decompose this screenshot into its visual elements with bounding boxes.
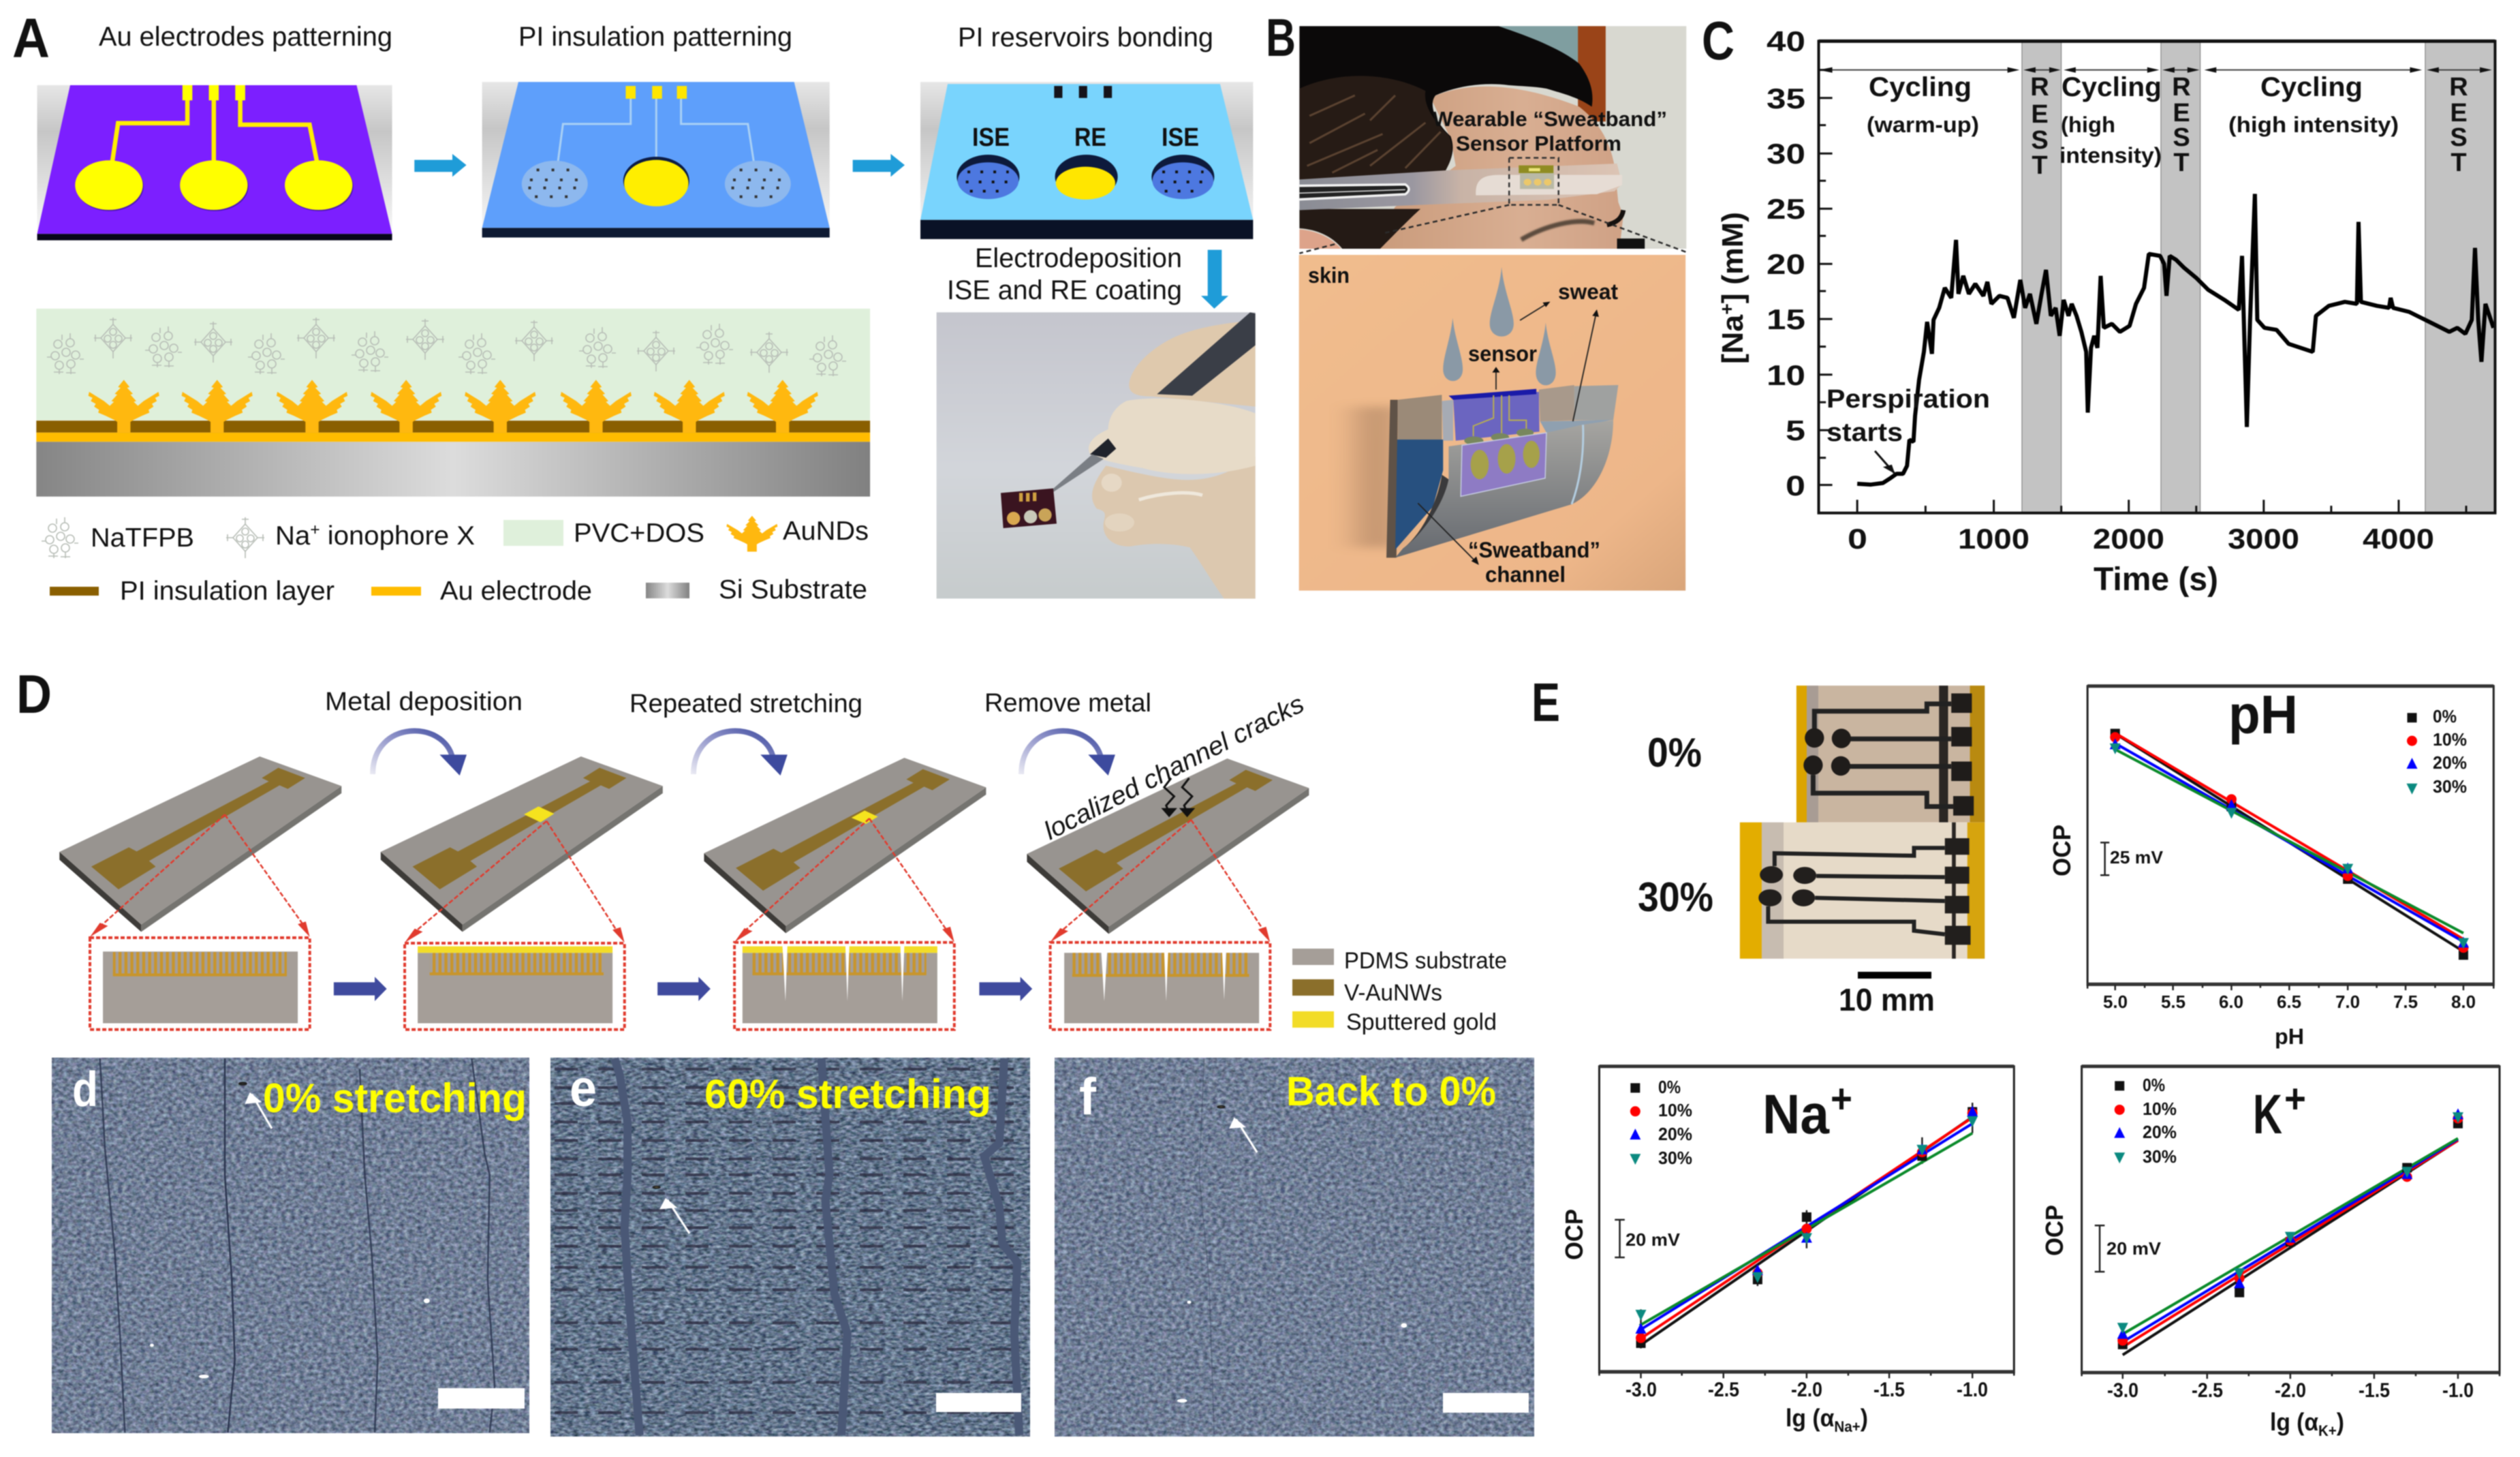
micrograph d: 0% stretching: d <box>72 1062 98 1117</box>
chart: K+ calibration: 20% <box>2143 1122 2177 1142</box>
process schematic: zoomed cross-sections <box>90 731 1270 1030</box>
y axis title: + <box>1716 303 1737 315</box>
scale label: 10 mm: 10 mm <box>1839 982 1935 1017</box>
chart: pH calibration: 25 mV <box>2110 847 2164 868</box>
micrograph e: 60% stretching: e <box>570 1060 597 1118</box>
arrow: step 1 to step 2 <box>414 154 467 177</box>
phase labels: T <box>2451 149 2467 177</box>
x axis title: Time (s) <box>2094 562 2218 598</box>
phase labels: T <box>2032 151 2048 180</box>
x axis tick labels: 2000 <box>2093 523 2164 555</box>
chart: Na+ calibration: Na <box>1762 1084 1830 1146</box>
micrograph d: 0% stretching: 0% stretching <box>263 1075 527 1121</box>
annotation: perspiration starts: starts <box>1826 418 1903 447</box>
label: Electrodeposition ISE and RE coating: ISE and RE coating <box>947 275 1182 305</box>
photo: device at 30% strain <box>1740 823 1985 959</box>
reservoir labels: ISE RE ISE <box>972 123 1199 152</box>
phase labels: Cycling <box>1869 72 1972 102</box>
panel D: stretching induced cracks <box>16 664 1534 1437</box>
chart: pH calibration: 8.0 <box>2451 992 2476 1012</box>
chart: Na+ calibration: -1.0 <box>1957 1379 1988 1401</box>
chart: K+ calibration: OCP <box>2040 1205 2068 1256</box>
photo: hand holding sensor with tweezers <box>937 312 1256 598</box>
phase labels: R <box>2172 73 2191 102</box>
legend: cross-section materials: AuNDs <box>783 517 869 546</box>
x axis tick labels: 3000 <box>2228 523 2299 555</box>
heading: PI insulation patterning: PI insulation patterning <box>518 22 792 52</box>
y axis title: [Na <box>1716 316 1749 364</box>
phase labels: (high intensity) <box>2228 112 2399 137</box>
legend: schematic materials: PDMS substrate <box>1344 948 1507 974</box>
x axis tick labels <box>1848 523 2434 555</box>
label: 30%: 30% <box>1638 874 1713 920</box>
chart: K+ calibration: -2.5 <box>2192 1379 2223 1402</box>
panel letter C: C <box>1702 10 1735 71</box>
chart: Na+ calibration: 20 mV <box>1625 1229 1681 1250</box>
chart: Na+ calibration: -2.0 <box>1791 1379 1822 1401</box>
phase labels: intensity) <box>2059 143 2162 168</box>
legend: cross-section materials: Si Substrate <box>719 575 867 604</box>
phase labels <box>1867 72 2468 180</box>
micrograph f: back to 0%: f <box>1079 1068 1097 1126</box>
panel letter D: D <box>16 664 52 724</box>
panel E: stretchable sensor calibration <box>1531 672 2500 1439</box>
y axis tick labels: 0 <box>1786 470 1805 502</box>
panel letter B: B <box>1266 7 1296 67</box>
heading: Au electrodes patterning: Au electrodes patterning <box>99 22 392 52</box>
phase labels: S <box>2450 123 2468 152</box>
phase labels: Cycling <box>2260 72 2363 102</box>
chart: K+ calibration: K <box>2253 1084 2282 1146</box>
chart: pH calibration: 20% <box>2433 752 2467 773</box>
x axis tick labels: 4000 <box>2363 523 2434 555</box>
label: Wearable Sweatband Sensor Platform: Wearable “Sweatband” <box>1433 107 1667 131</box>
label: 0%: 0% <box>1647 730 1702 776</box>
chart: pH calibration: OCP <box>2048 825 2076 876</box>
y axis title: ] (mM) <box>1716 212 1749 303</box>
chart: K+ calibration: -1.0 <box>2442 1379 2474 1402</box>
illustration: sensor on skin with sweat drops <box>1299 255 1685 591</box>
chart: pH calibration: pH <box>2228 684 2298 745</box>
chart: K+ calibration: -3.0 <box>2107 1379 2138 1402</box>
chart: pH calibration: 0% <box>2433 706 2457 726</box>
label: Wearable Sweatband Sensor Platform: Sensor Platform <box>1456 132 1621 155</box>
phase labels: (warm-up) <box>1867 112 1979 137</box>
labels on illustration: “Sweatband” <box>1468 538 1600 562</box>
scale bar <box>1858 972 1931 979</box>
step label: Repeated stretching: Repeated stretching <box>629 690 862 718</box>
x axis tick labels: 0 <box>1848 523 1867 555</box>
chart: pH calibration: 6.0 <box>2219 992 2243 1012</box>
legend: schematic materials: Sputtered gold <box>1346 1009 1497 1035</box>
device step 2: blue insulation layer <box>482 82 830 238</box>
phase labels: E <box>2173 99 2190 127</box>
chart: Na+ calibration: 0% <box>1658 1077 1681 1097</box>
y axis tick labels: 35 <box>1767 82 1805 114</box>
chart: pH calibration <box>2048 684 2493 1049</box>
chart: K+ calibration: 30% <box>2143 1146 2177 1167</box>
chart: Na+ calibration: -1.5 <box>1873 1379 1905 1401</box>
y axis tick labels: 30 <box>1767 138 1805 170</box>
reservoir labels: ISE RE ISE: RE <box>1074 123 1106 152</box>
micrograph f: back to 0% <box>1055 1058 1534 1437</box>
micrograph e: 60% stretching <box>550 1058 1030 1437</box>
chart: pH calibration: 5.0 <box>2103 992 2128 1012</box>
label: Wearable Sweatband Sensor Platform <box>1433 107 1667 155</box>
panel C: sodium concentration time series <box>1702 10 2495 598</box>
chart: K+ calibration: lg (α <box>2270 1408 2322 1436</box>
chart: K+ calibration: 0% <box>2143 1075 2165 1095</box>
photo: sweatband on forehead <box>1299 26 1686 254</box>
chart: Na+ calibration: lg (α <box>1786 1404 1837 1432</box>
annotation: perspiration starts: Perspiration <box>1826 385 1990 414</box>
chart: K+ calibration: -1.5 <box>2359 1379 2390 1402</box>
chart: pH calibration: 7.5 <box>2393 992 2418 1012</box>
phase labels: R <box>2449 73 2468 102</box>
process schematic: slabs <box>59 756 1309 934</box>
panel letter A: A <box>12 7 50 70</box>
phase labels: (high <box>2061 112 2115 137</box>
legend: cross-section materials <box>42 516 869 606</box>
micrograph d: 0% stretching <box>52 1058 529 1433</box>
chart: Na+ calibration: ) <box>1861 1404 1868 1432</box>
legend: cross-section materials: PI insulation layer <box>120 577 335 606</box>
phase labels: R <box>2030 73 2049 102</box>
chart: K+ calibration: 20 mV <box>2106 1238 2162 1259</box>
labels on illustration: sensor <box>1468 341 1537 366</box>
chart: Na+ calibration: 10% <box>1658 1100 1692 1120</box>
device step 3: PI reservoirs <box>920 82 1253 239</box>
annotation: localized channel cracks: localized channel cracks <box>1040 690 1309 846</box>
labels on illustration: sweat <box>1558 279 1618 304</box>
legend: cross-section materials: ionophore X <box>320 521 475 551</box>
label: Electrodeposition ISE and RE coating <box>947 243 1182 305</box>
step label: Metal deposition: Metal deposition <box>325 688 523 716</box>
label: Electrodeposition ISE and RE coating: Electrodeposition <box>975 243 1182 273</box>
photo: device at 0% strain <box>1796 686 1985 823</box>
chart: Na+ calibration: + <box>1831 1076 1852 1122</box>
chart: pH calibration: pH <box>2275 1024 2304 1049</box>
legend: cross-section materials: NaTFPB <box>91 523 194 553</box>
chart: pH calibration: 5.5 <box>2161 992 2185 1012</box>
chart: pH calibration: 30% <box>2433 776 2467 797</box>
legend: cross-section materials: + <box>310 521 320 539</box>
legend: schematic materials <box>1292 948 1507 1035</box>
chart: Na+ calibration <box>1560 1067 2014 1435</box>
reservoir labels: ISE RE ISE: ISE <box>1162 123 1199 152</box>
y axis tick labels: 15 <box>1767 303 1805 335</box>
chart: K+ calibration: K+ <box>2318 1422 2337 1439</box>
reservoir labels: ISE RE ISE: ISE <box>972 123 1010 152</box>
step label: Remove metal: Remove metal <box>984 689 1151 718</box>
phase labels: E <box>2031 100 2049 129</box>
annotation: perspiration starts <box>1826 385 1990 447</box>
phase labels: S <box>2173 123 2190 152</box>
legend: cross-section materials: PVC+DOS <box>574 519 704 548</box>
chart: K+ calibration: 10% <box>2143 1099 2177 1119</box>
chart: pH calibration: 7.0 <box>2335 992 2360 1012</box>
chart: K+ calibration: + <box>2284 1076 2306 1122</box>
micrograph e: 60% stretching: 60% stretching <box>704 1071 991 1117</box>
y axis tick labels: 5 <box>1786 414 1805 446</box>
arrow: down to photo <box>1201 250 1228 309</box>
arrow: step 2 to step 3 <box>853 154 905 177</box>
chart: K+ calibration <box>2040 1067 2500 1439</box>
labels on illustration: skin <box>1308 263 1350 288</box>
panel B: wearable sweatband sensor <box>1266 7 1686 591</box>
device step 1: purple substrate with gold electrodes <box>37 85 392 241</box>
micrograph f: back to 0%: Back to 0% <box>1286 1069 1496 1114</box>
labels on illustration <box>1308 263 1618 587</box>
phase labels: E <box>2450 99 2468 127</box>
phase labels: S <box>2031 126 2049 155</box>
chart: Na+ calibration: -3.0 <box>1625 1379 1657 1401</box>
y axis tick labels: 40 <box>1767 25 1805 57</box>
chart: Na+ calibration: Na+ <box>1834 1418 1861 1435</box>
chart: K+ calibration: -2.0 <box>2275 1379 2306 1402</box>
chart: Na+ calibration: 20% <box>1658 1124 1692 1144</box>
chart: Na+ calibration: -2.5 <box>1708 1379 1739 1401</box>
x axis tick labels: 1000 <box>1958 523 2029 555</box>
labels on illustration: channel <box>1485 562 1566 587</box>
chart: Na+ calibration: OCP <box>1560 1209 1588 1260</box>
y axis tick labels <box>1767 25 1805 502</box>
legend: cross-section materials: Na <box>275 521 309 551</box>
panel A: fabrication process <box>12 7 1256 606</box>
phase labels: Cycling <box>2062 72 2162 102</box>
y axis tick labels: 10 <box>1767 359 1805 391</box>
legend: cross-section materials: Au electrode <box>440 577 592 606</box>
y axis tick labels: 25 <box>1767 193 1805 225</box>
heading: PI reservoirs bonding: PI reservoirs bonding <box>958 22 1213 52</box>
chart: pH calibration: 10% <box>2433 729 2467 750</box>
cross-section diagram <box>36 309 870 497</box>
panel letter E: E <box>1531 672 1560 733</box>
legend: schematic materials: V-AuNWs <box>1344 980 1442 1006</box>
chart: pH calibration: 6.5 <box>2277 992 2301 1012</box>
phase labels: T <box>2173 149 2190 177</box>
line chart: Na+ vs time <box>1819 41 2495 513</box>
chart: K+ calibration: ) <box>2337 1408 2344 1436</box>
chart: Na+ calibration: 30% <box>1658 1148 1692 1168</box>
y axis tick labels: 20 <box>1767 248 1805 280</box>
